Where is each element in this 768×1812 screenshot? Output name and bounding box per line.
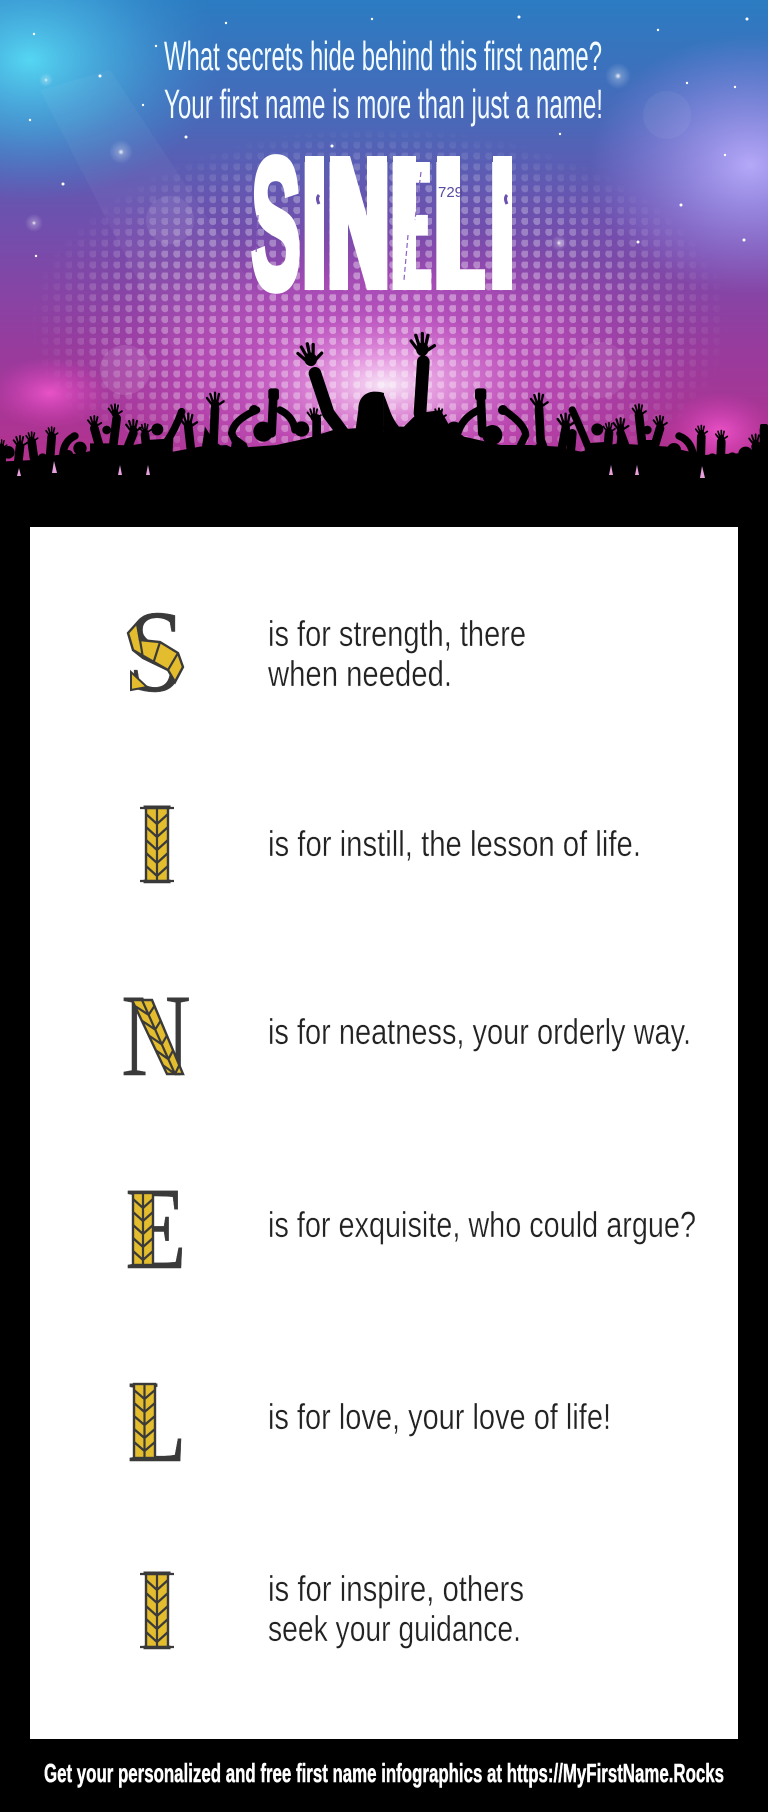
text [268,1568,524,1649]
row: S [127,586,526,717]
header background [0,0,768,462]
letter I icon: I [140,1544,174,1675]
text: when needed. [267,653,452,694]
text [267,613,526,694]
letter L icon: L [127,1356,187,1487]
row: L [127,1356,611,1487]
title: SINELI: S [251,121,301,328]
central hand and arm right [411,333,434,413]
white panel [30,527,738,1739]
title: SINELI [251,121,521,330]
title: SINELI: I [296,123,332,330]
crowd left half [0,341,384,490]
title: SINELI: N [323,123,394,330]
row: E [125,1163,696,1294]
title: SINELI: I [483,123,521,330]
sparkles [25,16,748,257]
title: SINELI: 729 [438,184,463,201]
crowd silhouette [0,333,768,527]
letter N icon: N [121,970,191,1101]
central hand and arm left [296,341,343,433]
crowd gaps [17,461,705,478]
text: is for instill, the lesson of life. [268,823,641,864]
text: is for strength, there [268,613,526,654]
row: N [121,970,691,1101]
text: is for inspire, others [268,1568,524,1609]
text: is for love, your love of life! [268,1396,611,1437]
letter E icon: E [125,1163,187,1294]
letter S icon: S [127,586,185,717]
text: seek your guidance. [268,1608,521,1649]
crowd right half [384,333,768,490]
crowd base [0,432,768,527]
row: I [140,778,641,909]
row: I second [140,1544,524,1675]
title: SINELI: E [388,123,434,330]
title: SINELI: L [430,123,488,330]
letter I icon: I [140,778,174,909]
